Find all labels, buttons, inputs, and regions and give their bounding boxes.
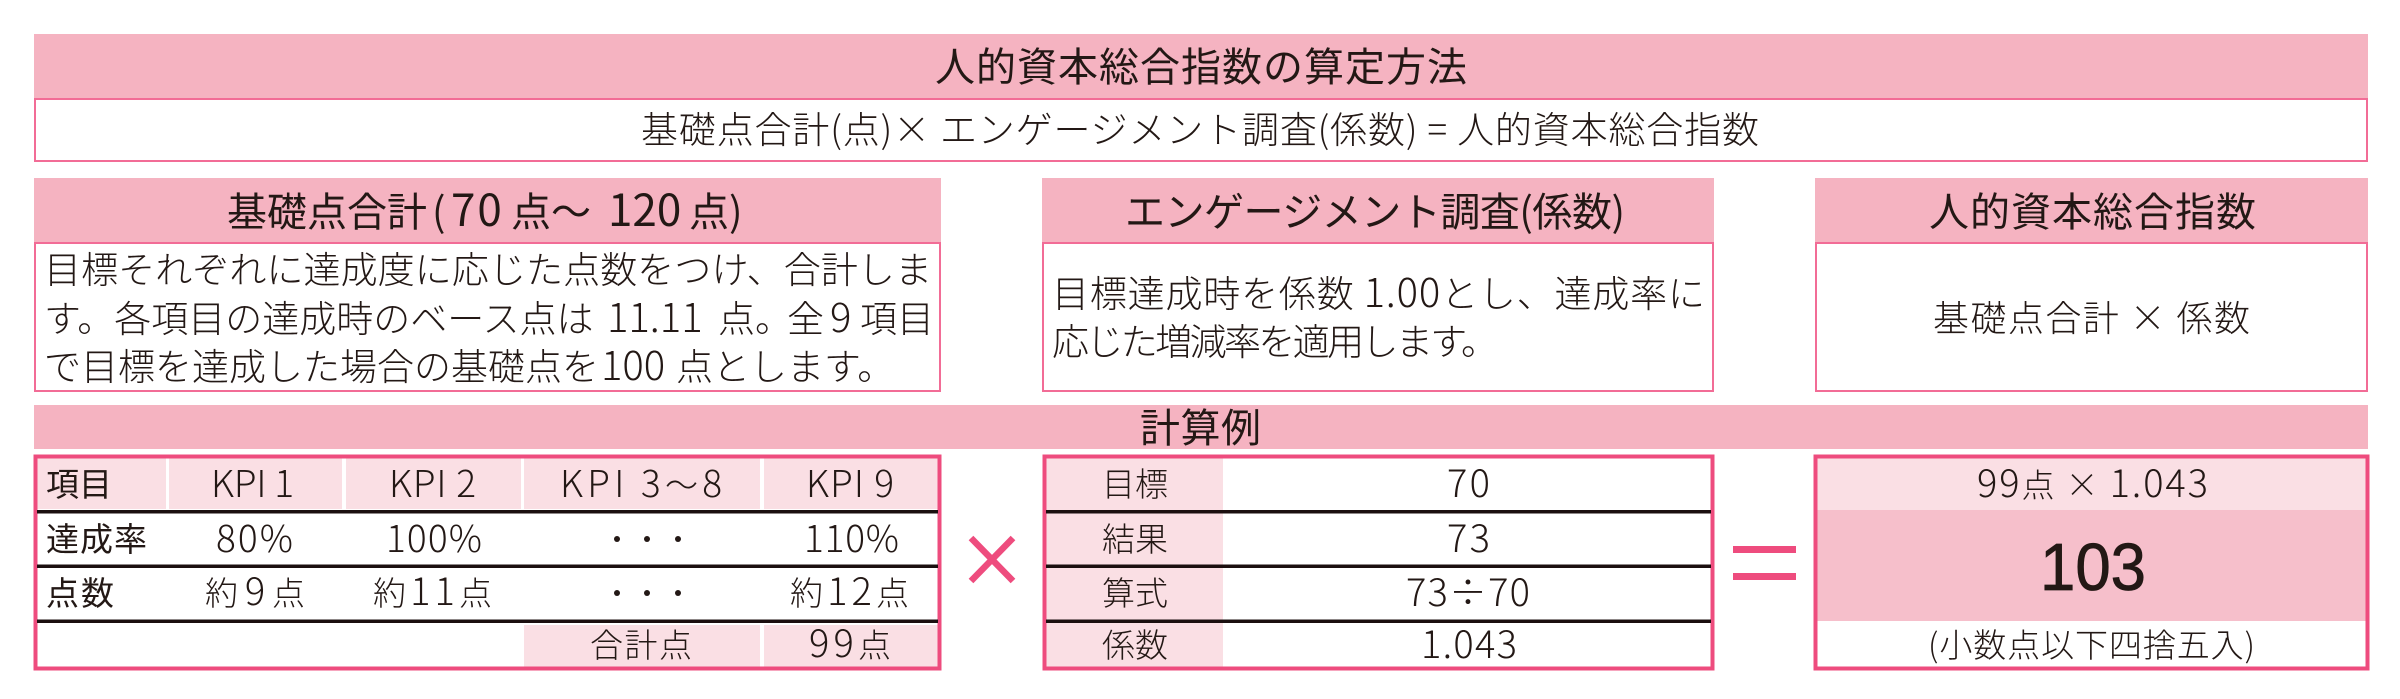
heading bar: [34, 178, 941, 243]
rounding note: (小数点以下四捨五入): [1928, 619, 2255, 667]
panel: base points: [34, 175, 941, 392]
heading bar: [1042, 178, 1714, 243]
heading: 点: [511, 180, 551, 238]
table: coefficient: [1044, 453, 1712, 669]
points row: 約11点: [373, 561, 492, 616]
result box: [1816, 453, 2368, 668]
total row: 合計点: [590, 619, 692, 667]
description: 点とします。: [676, 337, 894, 391]
body box: [1816, 243, 2367, 391]
total row: [590, 613, 891, 668]
panel: formula header: [34, 34, 2368, 161]
description: 全: [787, 289, 824, 343]
description: す。各項目の達成時のベース点は: [44, 289, 593, 343]
heading: 70: [451, 175, 504, 239]
points row: 点数: [46, 567, 114, 615]
heading: (: [432, 180, 446, 238]
target row: 目標: [1102, 458, 1168, 506]
target row: 70: [1447, 453, 1490, 508]
description: 目標達成時を係数 1.00とし、達成率に: [1052, 261, 1705, 319]
formula row: 73÷70: [1406, 562, 1530, 617]
description: 点。: [718, 289, 792, 343]
body box: [35, 243, 940, 391]
calculation: 99点 × 1.043: [1977, 453, 2208, 508]
heading bar: [1815, 178, 2368, 243]
achievement row: 80%: [216, 509, 293, 563]
heading: エンゲージメント調査(係数): [1125, 180, 1625, 238]
description: [44, 240, 934, 392]
coefficient row: [1102, 614, 1517, 669]
header row: KPI 1: [211, 454, 294, 508]
target row: [1102, 453, 1490, 508]
header row: KPI 2: [389, 454, 476, 508]
title: 人的資本総合指数の算定方法: [935, 35, 1467, 93]
title bar: [34, 34, 2368, 99]
result value: 103: [2040, 530, 2146, 605]
achievement row: 110%: [804, 509, 899, 563]
description: 基礎点合計 × 係数: [1933, 290, 2250, 342]
formula box: [35, 99, 2367, 161]
points row: 約9点: [205, 561, 305, 616]
description: 100: [601, 334, 665, 392]
coefficient row: 係数: [1102, 619, 1168, 667]
heading: 点: [689, 180, 729, 238]
formula: 基礎点合計(点)× エンゲージメント調査(係数) = 人的資本総合指数: [641, 100, 1759, 154]
heading: 基礎点合計: [227, 180, 427, 238]
result row: 結果: [1102, 513, 1168, 561]
section bar: calculation example: [34, 396, 2368, 454]
achievement row: 100%: [386, 509, 482, 563]
heading: 人的資本総合指数: [1929, 180, 2256, 238]
heading: 120: [608, 175, 681, 239]
description: で目標を達成した場合の基礎点を: [44, 337, 599, 391]
description: [1052, 261, 1705, 366]
description: 11.11: [607, 286, 703, 344]
header row: KPI 9: [806, 454, 894, 508]
achievement row: [46, 509, 899, 563]
header row: [46, 454, 894, 508]
section bar: calculation example: 計算例: [1140, 396, 1261, 454]
panel: total index: [1815, 178, 2368, 391]
coefficient row: 1.043: [1421, 614, 1517, 669]
heading: ): [729, 180, 743, 238]
points row: [46, 561, 909, 616]
panel: engagement survey: [1042, 178, 1714, 391]
achievement row: 達成率: [46, 513, 147, 561]
table: KPI points: [36, 454, 940, 668]
description: 目標それぞれに達成度に応じた点数をつけ、合計しま: [44, 240, 932, 294]
heading: 〜: [551, 180, 591, 238]
description: 項目: [860, 289, 934, 343]
icon: multiply: [971, 538, 1013, 581]
header row: 項目: [46, 458, 112, 506]
icon: equals: [1733, 546, 1796, 580]
points row: 約12点: [790, 561, 909, 616]
result row: 73: [1447, 508, 1490, 563]
description: 応じた増減率を適用します。: [1052, 312, 1498, 366]
body box: [1043, 243, 1713, 391]
result row: [1102, 508, 1490, 563]
table shading: [36, 457, 939, 668]
formula row: 算式: [1102, 567, 1168, 615]
formula row: [1102, 562, 1530, 617]
description: 9: [830, 286, 851, 344]
header row: KPI 3〜8: [560, 454, 722, 508]
total row: 99点: [809, 613, 891, 668]
